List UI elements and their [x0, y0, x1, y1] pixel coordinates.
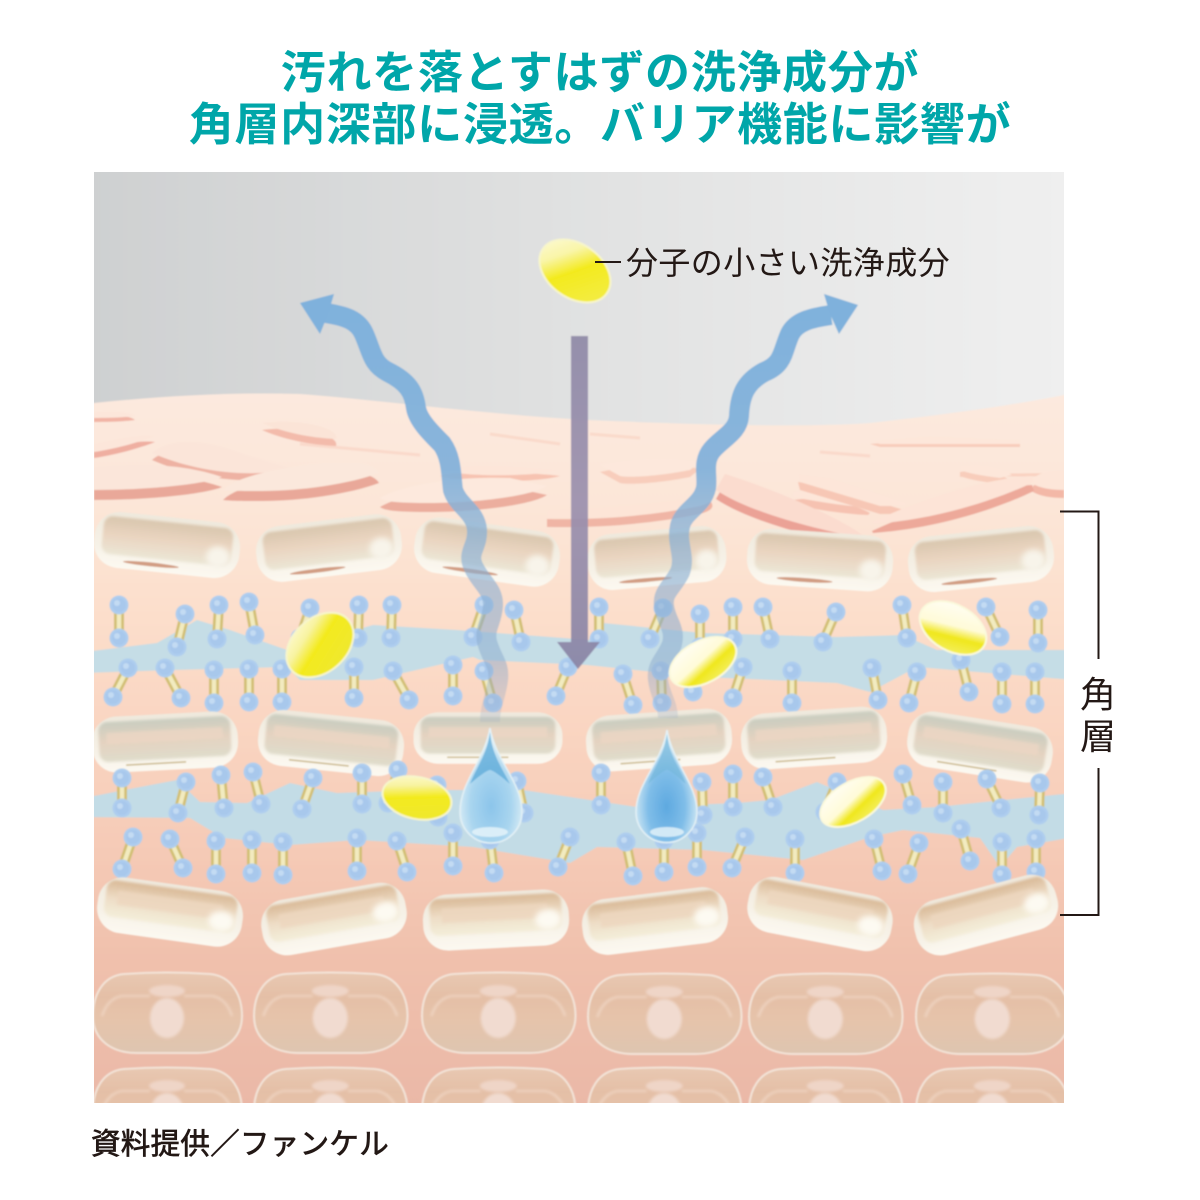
yellow capsule: legend sample [538, 238, 612, 304]
lipid band upper [84, 620, 1074, 692]
source credit: 資料提供／ファンケル [91, 1128, 389, 1161]
skin base layers [84, 393, 1074, 1113]
lipid molecules lower bilayer [122, 770, 1040, 876]
bracket: stratum corneum: 層 [1080, 716, 1116, 757]
cells row E: living cells cropped [94, 1066, 1064, 1103]
title: 汚れを落とすはずの洗浄成分が [281, 47, 919, 98]
title [189, 47, 1011, 150]
lipid molecules upper bilayer [113, 602, 1038, 705]
yellow capsule 4 [380, 774, 454, 822]
lipid band lower [84, 780, 1074, 867]
cells row A: corneocytes [91, 510, 1057, 594]
cells row B: corneocytes [91, 705, 1056, 786]
title: 角層内深部に浸透。バリア機能に影響が [189, 99, 1011, 150]
flakes: stratum corneum surface [94, 416, 1064, 534]
bracket: stratum corneum: 角 [1080, 674, 1116, 715]
arrow: moisture escaping right [658, 294, 858, 718]
panel: skin cross-section diagram [84, 162, 1074, 1148]
yellow capsule 3 [918, 600, 988, 657]
cells row D: living cells [93, 972, 1070, 1054]
yellow capsule 2 [668, 635, 738, 689]
bracket: stratum corneum [1060, 512, 1116, 915]
water drop right [636, 730, 697, 842]
arrow: moisture escaping left [300, 294, 498, 722]
background: air above skin [94, 172, 1064, 426]
yellow capsule 1 [284, 612, 356, 679]
cells row C: corneocytes [96, 874, 1059, 956]
callout: small-molecule cleansing ingredient: 分子の小さい洗浄成分 [626, 245, 950, 281]
water drop left [460, 728, 522, 843]
arrow: cleansing ingredient penetrating [557, 336, 600, 669]
yellow capsule 5 [818, 776, 888, 829]
